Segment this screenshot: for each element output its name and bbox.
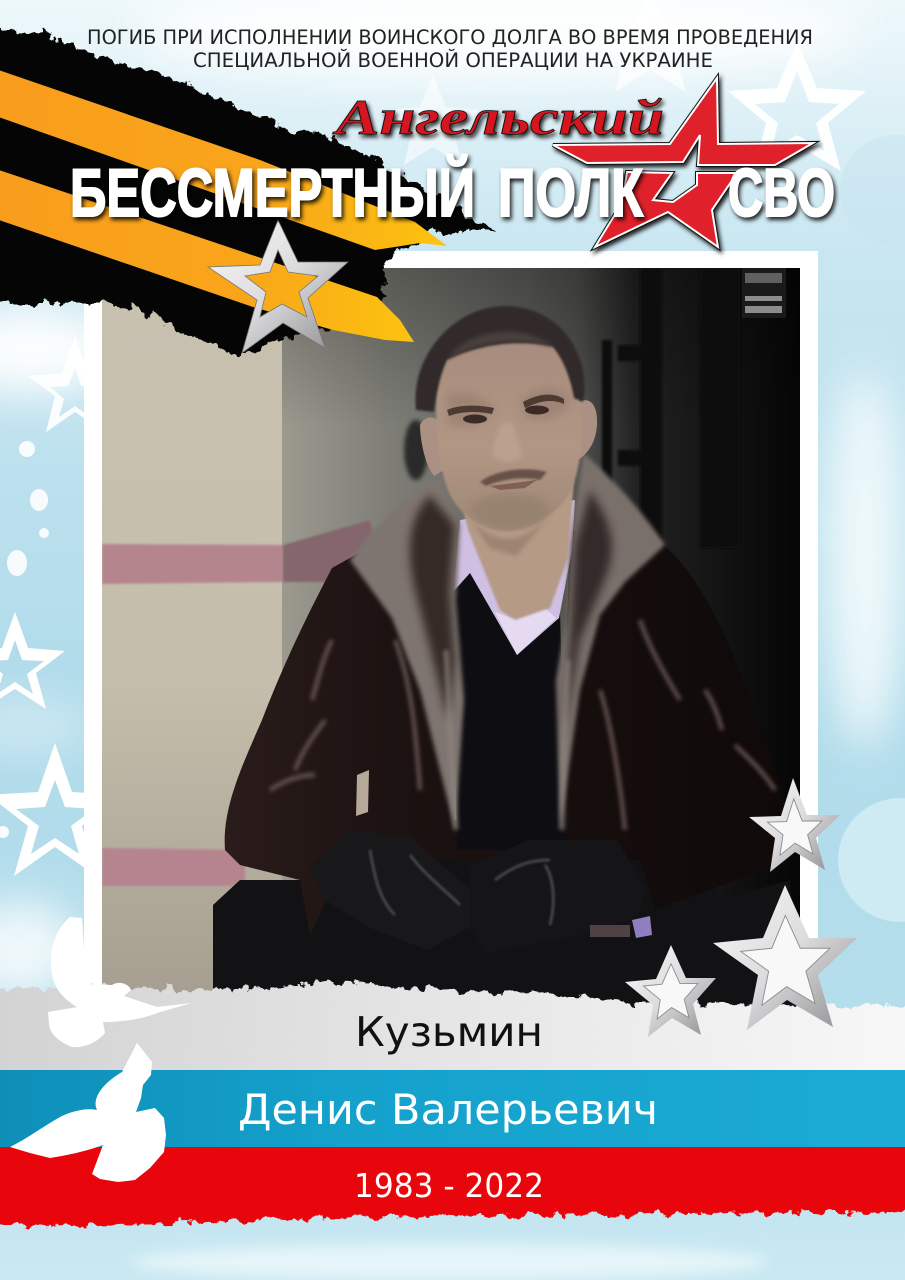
sweater — [452, 570, 566, 850]
top caption: СПЕЦИАЛЬНОЙ ВОЕННОЙ ОПЕРАЦИИ НА УКРАИНЕ — [193, 49, 713, 72]
silver stars: lower right — [625, 778, 857, 1037]
top caption — [87, 26, 813, 72]
lower orange stripe — [0, 167, 414, 342]
blue ribbon — [0, 1070, 905, 1147]
eyes — [463, 414, 487, 424]
icon: white dove upper — [48, 917, 192, 1047]
jacket highlights — [270, 620, 775, 830]
zipper trims — [446, 650, 568, 830]
surname: Кузьмин — [355, 1008, 543, 1056]
St George ribbon — [0, 26, 497, 357]
right brow — [523, 395, 564, 408]
decorative white stars: background — [0, 0, 866, 876]
upper orange stripe — [0, 67, 447, 250]
decorative white dots — [0, 441, 49, 838]
silver star on ribbon — [208, 220, 348, 353]
red ribbon torn lower edge — [0, 1165, 905, 1226]
head shadow on wall — [404, 420, 428, 480]
icon: red army star — [553, 78, 813, 247]
jacket — [225, 530, 790, 935]
ribbon black base — [0, 26, 497, 357]
nose — [493, 422, 522, 462]
neck — [462, 480, 574, 620]
gloves — [309, 830, 652, 953]
gap between arm and torso — [356, 770, 369, 816]
red ribbon solid — [0, 1147, 905, 1205]
main title: БЕССМЕРТНЫЙ — [70, 154, 475, 231]
pink stripes — [102, 544, 283, 584]
main title: СВО — [728, 155, 835, 231]
script title: Ангельский — [332, 89, 664, 145]
main title: ПОЛК — [498, 155, 643, 231]
fur collar — [350, 453, 665, 830]
head — [415, 306, 597, 531]
top caption: ПОГИБ ПРИ ИСПОЛНЕНИИ ВОИНСКОГО ДОЛГА ВО ВРЕМЯ ПРОВЕДЕНИЯ — [87, 26, 813, 49]
grey wall and dark columns — [282, 268, 800, 1008]
left brow — [447, 406, 494, 416]
legs — [213, 820, 800, 1010]
years of life: 1983 - 2022 — [354, 1166, 544, 1205]
torn grey-white name band — [0, 984, 905, 1082]
portrait photograph — [102, 268, 800, 1010]
icon: white dove lower — [10, 1043, 166, 1182]
wall sign — [742, 268, 786, 318]
moustache and mouth — [480, 469, 547, 486]
given name and patronymic: Денис Валерьевич — [238, 1085, 658, 1134]
white photo frame — [84, 251, 818, 1011]
beige wall — [102, 268, 284, 1008]
shirt — [453, 500, 575, 655]
hair — [415, 306, 585, 412]
